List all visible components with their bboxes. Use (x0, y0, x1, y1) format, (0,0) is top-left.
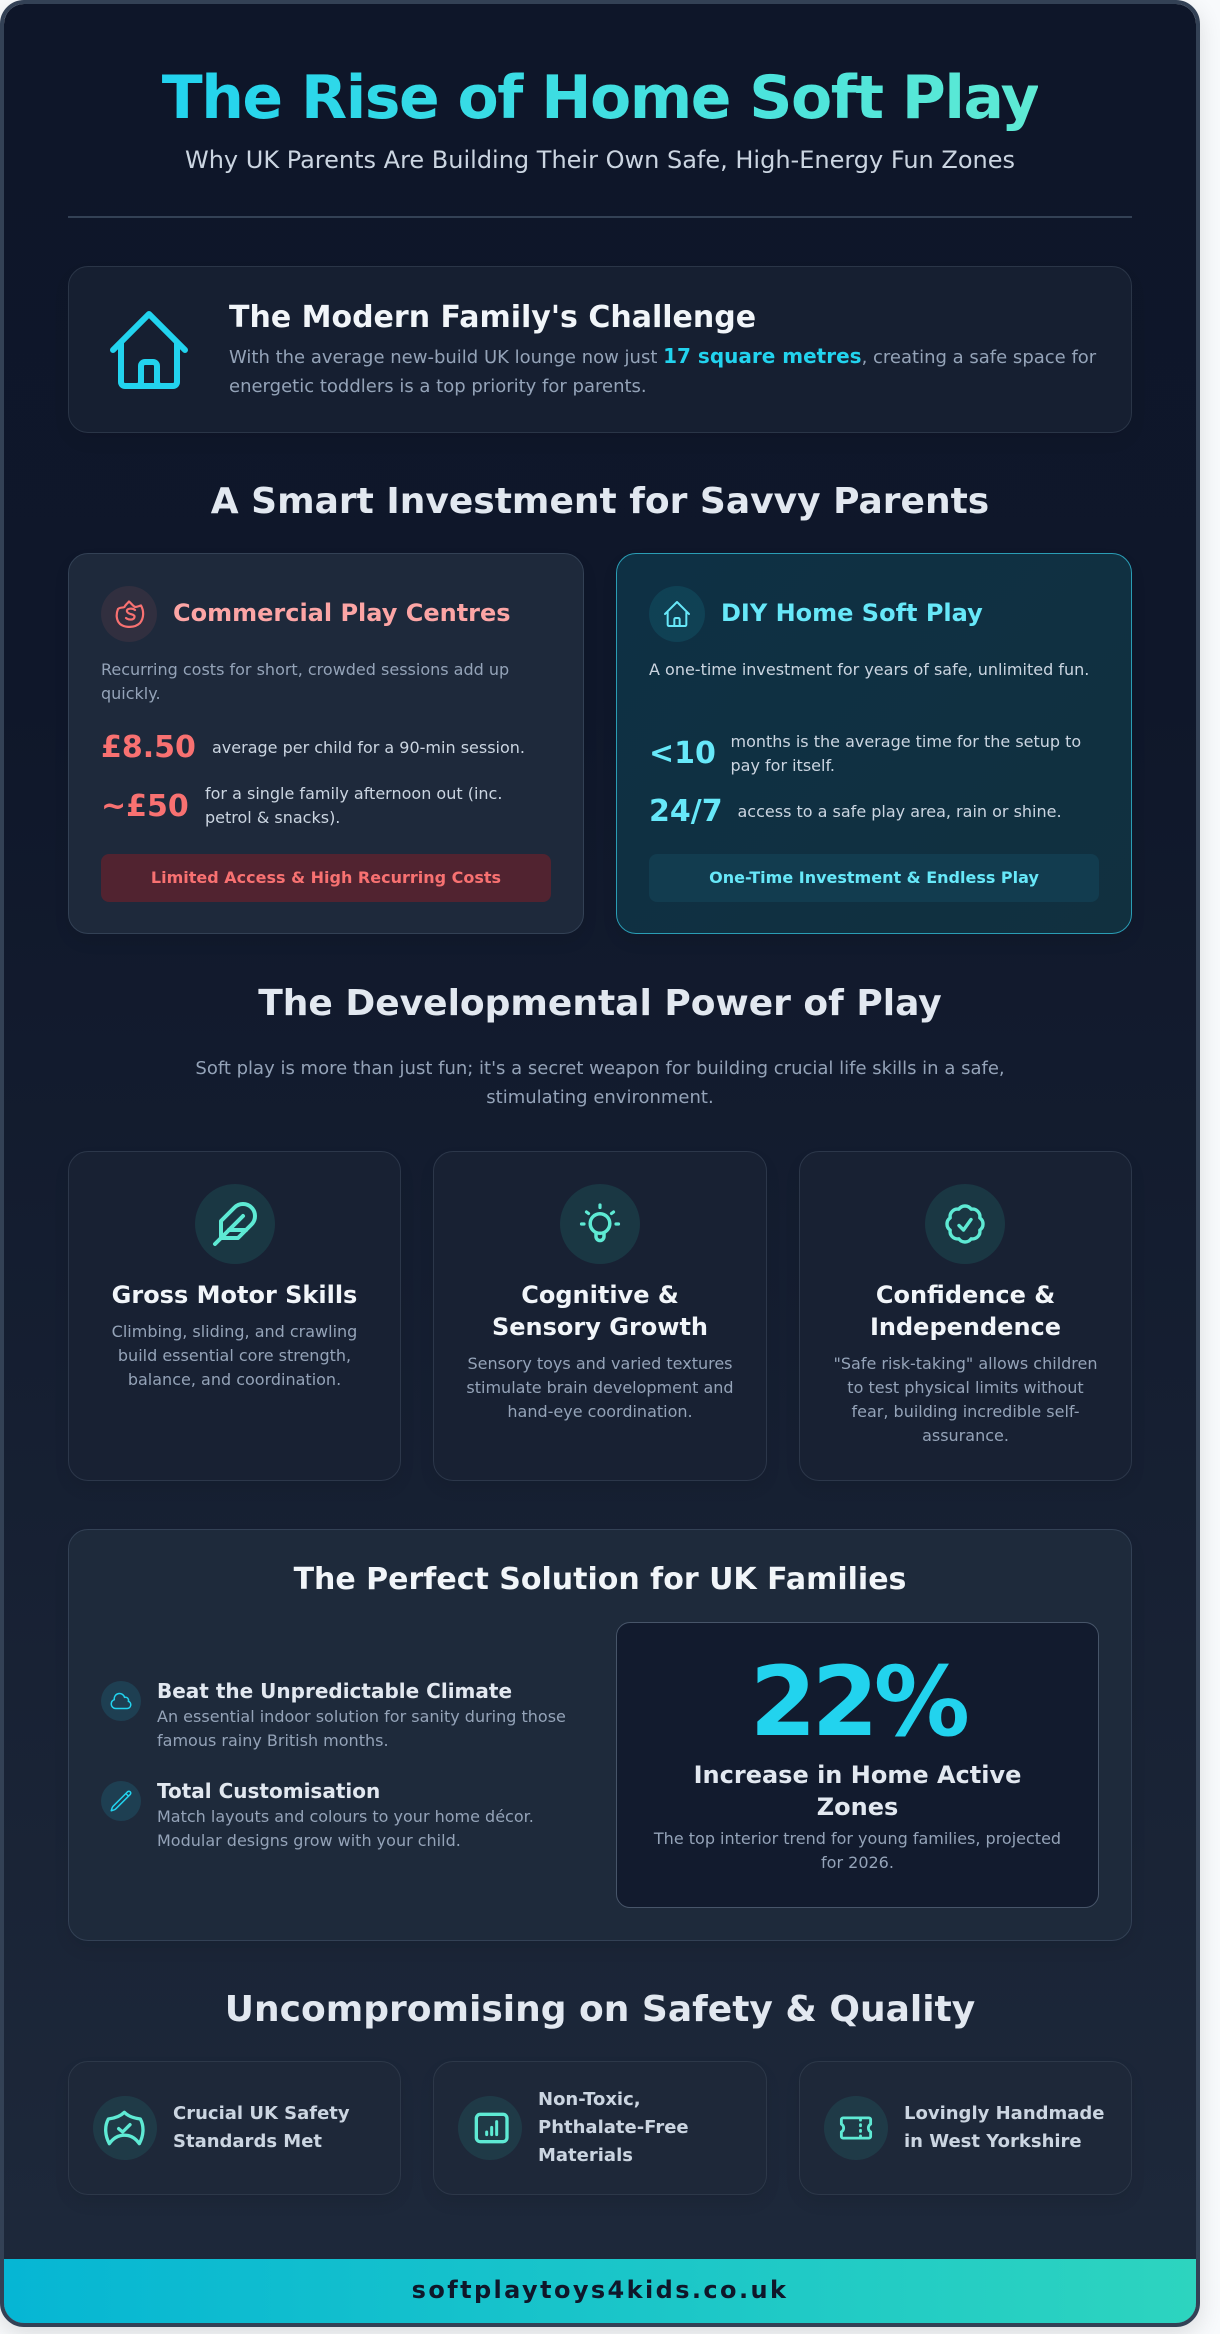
confidence heading: Independence (870, 1313, 1061, 1341)
icon: light bulb (560, 1184, 640, 1264)
challenge text: With the average new-build UK lounge now just 17 square metres, creating a safe space for (229, 344, 1096, 368)
gross motor text: balance, and coordination. (128, 1370, 341, 1389)
customisation text (157, 1807, 534, 1850)
cognitive text: hand-eye coordination. (507, 1402, 693, 1421)
stat note: The top interior trend for young families, projected (654, 1829, 1061, 1848)
non-toxic text: Materials (538, 2145, 633, 2166)
callout: one-time investment: One-Time Investment & Endless Play (709, 868, 1039, 887)
non-toxic text (538, 2089, 689, 2166)
developmental intro text: Soft play is more than just fun; it's a secret weapon for building crucial life skills in a safe, (195, 1058, 1005, 1079)
gross motor text: Climbing, sliding, and crawling (112, 1322, 357, 1341)
icon: check badge (925, 1184, 1005, 1264)
customisation text: Modular designs grow with your child. (157, 1831, 461, 1850)
stat note (654, 1829, 1061, 1872)
diy description: A one-time investment for years of safe, unlimited fun. (649, 660, 1089, 679)
challenge text: energetic toddlers is a top priority for parents. (229, 376, 647, 397)
icon: chart frame (458, 2096, 522, 2160)
confidence text: assurance. (922, 1426, 1009, 1445)
stat: 24/7: 24/7 (649, 794, 723, 829)
stat: 24/7: access to a safe play area, rain or shine. (738, 802, 1062, 821)
panel: gross motor skills (68, 1151, 401, 1481)
callout: limited access (101, 854, 551, 902)
developmental intro text: stimulating environment. (486, 1087, 714, 1108)
commercial heading: Commercial Play Centres (173, 599, 511, 627)
big number: 22% (750, 1646, 965, 1758)
callout: limited access: Limited Access & High Recurring Costs (151, 868, 501, 887)
cognitive text (466, 1354, 734, 1421)
cognitive text: stimulate brain development and (466, 1378, 734, 1397)
safety text: Standards Met (173, 2131, 322, 2152)
heading: smart investment: A Smart Investment for Savvy Parents (211, 481, 989, 522)
stat label (694, 1761, 1021, 1821)
stat: ~£50 (101, 784, 502, 827)
gross motor heading: Gross Motor Skills (112, 1281, 357, 1309)
title: The Rise of Home Soft Play (162, 63, 1038, 133)
cognitive heading: Sensory Growth (492, 1313, 708, 1341)
handmade text: Lovingly Handmade (904, 2103, 1105, 2124)
customisation title: Total Customisation (157, 1779, 380, 1803)
panel: non-toxic materials (433, 2061, 767, 2195)
gross motor text (112, 1322, 357, 1389)
cognitive text: Sensory toys and varied textures (467, 1354, 733, 1373)
confidence text: fear, building incredible self- (852, 1402, 1079, 1421)
stat label: Zones (817, 1793, 898, 1821)
icon: shield (93, 2096, 157, 2160)
panel: diy home soft play (616, 553, 1132, 934)
heading: safety and quality: Uncompromising on Safety & Quality (225, 1989, 975, 2030)
icon: pencil (101, 1781, 141, 1821)
handmade text (904, 2103, 1105, 2152)
panel: handmade (799, 2061, 1132, 2195)
stat card: 22% (616, 1622, 1099, 1908)
confidence text: to test physical limits without (847, 1378, 1084, 1397)
heading: developmental power: The Developmental Power of Play (258, 983, 942, 1024)
subtitle: Why UK Parents Are Building Their Own Safe, High-Energy Fun Zones (185, 146, 1015, 174)
confidence heading (870, 1281, 1061, 1341)
developmental intro text (195, 1058, 1005, 1108)
stat: 24/7 (649, 794, 1062, 829)
commercial description: quickly. (101, 684, 161, 703)
safety text (173, 2103, 350, 2152)
challenge text (229, 344, 1096, 397)
stat note: for 2026. (821, 1853, 894, 1872)
solution heading: The Perfect Solution for UK Families (294, 1562, 906, 1597)
icon: small house (649, 586, 705, 642)
icon: cloud (101, 1681, 141, 1721)
commercial description: Recurring costs for short, crowded sessions add up (101, 660, 509, 679)
climate text: An essential indoor solution for sanity during those (157, 1707, 566, 1726)
climate text (157, 1707, 566, 1750)
icon: ticket (824, 2096, 888, 2160)
panel: perfect solution (68, 1529, 1132, 1941)
commercial description (101, 660, 509, 703)
callout: one-time investment (649, 854, 1099, 902)
panel: confidence and independence (799, 1151, 1132, 1481)
icon: money flame (101, 586, 157, 642)
stat: ~£50: ~£50 (101, 789, 189, 824)
stat: under 10 months: pay for itself. (730, 756, 835, 775)
climate title: Beat the Unpredictable Climate (157, 1679, 512, 1703)
stat label: Increase in Home Active (694, 1761, 1021, 1789)
challenge heading: The Modern Family's Challenge (229, 300, 756, 335)
stat: ~£50: petrol & snacks). (205, 808, 340, 827)
stat: under 10 months: <10 (649, 736, 716, 771)
cognitive heading (492, 1281, 708, 1341)
footer band (4, 2259, 1196, 2327)
safety text: Crucial UK Safety (173, 2103, 350, 2124)
stat: under 10 months (649, 732, 1081, 775)
non-toxic text: Phthalate-Free (538, 2117, 689, 2138)
benefit: climate (101, 1679, 566, 1750)
confidence text (834, 1354, 1098, 1445)
customisation text: Match layouts and colours to your home décor. (157, 1807, 534, 1826)
confidence heading: Confidence & (876, 1281, 1055, 1309)
website address: softplaytoys4kids.co.uk (412, 2276, 788, 2304)
panel: commercial play centres (68, 553, 584, 934)
panel: the modern family's challenge (68, 266, 1132, 433)
stat: £8.50: average per child for a 90-min session. (212, 738, 525, 757)
icon: feather (195, 1184, 275, 1264)
panel: cognitive and sensory growth (433, 1151, 767, 1481)
stat: under 10 months: months is the average time for the setup to (730, 732, 1081, 751)
confidence text: "Safe risk-taking" allows children (834, 1354, 1098, 1373)
stat: ~£50: for a single family afternoon out (inc. (205, 784, 502, 803)
stat: £8.50 (101, 730, 525, 765)
benefit: customisation (101, 1779, 534, 1850)
handmade text: in West Yorkshire (904, 2131, 1082, 2152)
cognitive heading: Cognitive & (521, 1281, 679, 1309)
climate text: famous rainy British months. (157, 1731, 389, 1750)
gross motor text: build essential core strength, (118, 1346, 351, 1365)
non-toxic text: Non-Toxic, (538, 2089, 641, 2110)
icon: house (110, 311, 188, 389)
panel: safety standards (68, 2061, 401, 2195)
stat: £8.50: £8.50 (101, 730, 196, 765)
diy heading: DIY Home Soft Play (721, 599, 983, 627)
